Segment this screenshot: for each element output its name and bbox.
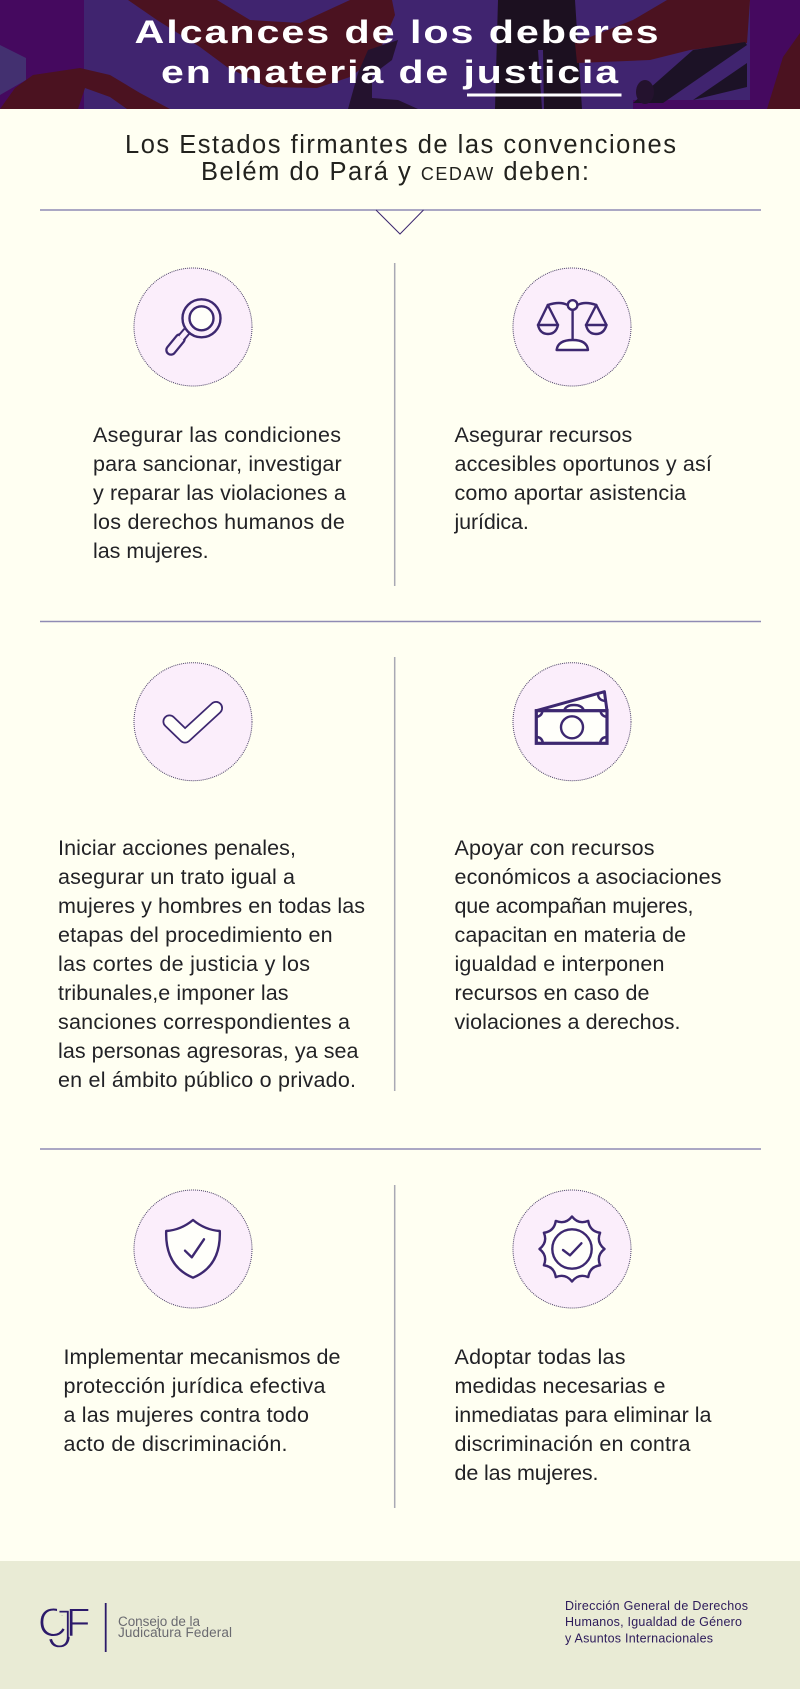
title: en materia de justicia — [161, 54, 620, 90]
logo: Consejo de la Judicatura Federal: Consejo de la — [118, 1614, 200, 1629]
text block: tribunales,e imponer las — [58, 981, 288, 1005]
text block: las personas agresoras, ya sea — [58, 1039, 359, 1063]
text block — [58, 836, 365, 1092]
text block — [454, 1345, 712, 1485]
intro text: Los Estados firmantes de las convenciones — [125, 131, 676, 159]
text block: sanciones correspondientes a — [58, 1010, 350, 1034]
intro text — [125, 131, 676, 186]
panel: sancionar — [93, 268, 346, 563]
text block — [454, 836, 722, 1034]
text block: los derechos humanos de — [93, 510, 345, 534]
icon: scales — [513, 268, 631, 386]
text block — [454, 423, 712, 534]
text block: y reparar las violaciones a — [93, 481, 346, 505]
logo: Consejo de la Judicatura Federal: F — [66, 1601, 90, 1645]
panel: protección jurídica — [64, 1190, 340, 1456]
footer credit text: Humanos, Igualdad de Género — [565, 1615, 742, 1629]
panel: recursos accesibles — [454, 268, 712, 534]
intro text: Belém do Pará y CEDAW deben: — [201, 158, 589, 186]
text block: medidas necesarias e — [454, 1374, 666, 1398]
text block: capacitan en materia de — [454, 923, 686, 947]
text block: Asegurar recursos — [454, 423, 632, 447]
panel: acciones penales — [58, 663, 365, 1092]
text block: protección jurídica efectiva — [64, 1374, 326, 1398]
logo: Consejo de la Judicatura Federal: Judicatura Federal — [118, 1625, 232, 1640]
text block: las cortes de justicia y los — [58, 952, 310, 976]
text block: igualdad e interponen — [454, 952, 664, 976]
text block: de las mujeres. — [454, 1461, 598, 1485]
text block: asegurar un trato igual a — [58, 865, 295, 889]
text block: para sancionar, investigar — [93, 452, 342, 476]
text block: las mujeres. — [93, 539, 209, 563]
footer — [0, 1561, 800, 1689]
text block: Implementar mecanismos de — [64, 1345, 340, 1369]
text block: como aportar asistencia — [454, 481, 686, 505]
footer credit text: y Asuntos Internacionales — [565, 1632, 713, 1646]
text block: accesibles oportunos y así — [454, 452, 712, 476]
text block: Adoptar todas las — [454, 1345, 626, 1369]
text block: jurídica. — [454, 510, 529, 534]
text block — [93, 423, 346, 563]
title: Alcances de los deberes — [134, 14, 660, 50]
footer credit text: Dirección General de Derechos — [565, 1599, 748, 1613]
divider with triangle pointer — [40, 210, 761, 234]
footer credit text — [565, 1599, 748, 1646]
text block: Iniciar acciones penales, — [58, 836, 296, 860]
text block: recursos en caso de — [454, 981, 650, 1005]
logo: Consejo de la Judicatura Federal — [38, 1597, 232, 1660]
text block: discriminación en contra — [454, 1432, 691, 1456]
text block: acto de discriminación. — [64, 1432, 288, 1456]
text block: violaciones a derechos. — [454, 1010, 680, 1034]
text block: que acompañan mujeres, — [454, 894, 694, 918]
text block: mujeres y hombres en todas las — [58, 894, 365, 918]
text block: Asegurar las condiciones — [93, 423, 341, 447]
panel: recursos económicos — [454, 663, 722, 1034]
text block: Apoyar con recursos — [454, 836, 654, 860]
icon: banknotes — [513, 663, 631, 781]
title — [134, 14, 660, 96]
text block — [64, 1345, 340, 1456]
text block: a las mujeres contra todo — [64, 1403, 309, 1427]
icon: seal with check — [513, 1190, 631, 1308]
header banner — [0, 0, 800, 109]
icon: magnifying glass — [134, 268, 252, 386]
logo: Consejo de la Judicatura Federal: J — [47, 1597, 75, 1660]
text block: en el ámbito público o privado. — [58, 1068, 356, 1092]
text block: económicos a asociaciones — [454, 865, 722, 889]
icon: check mark — [134, 663, 252, 781]
text block: inmediatas para eliminar la — [454, 1403, 712, 1427]
text block: etapas del procedimiento en — [58, 923, 333, 947]
panel: medidas necesarias — [454, 1190, 712, 1485]
icon: shield — [134, 1190, 252, 1308]
logo: Consejo de la Judicatura Federal: C — [38, 1601, 67, 1645]
